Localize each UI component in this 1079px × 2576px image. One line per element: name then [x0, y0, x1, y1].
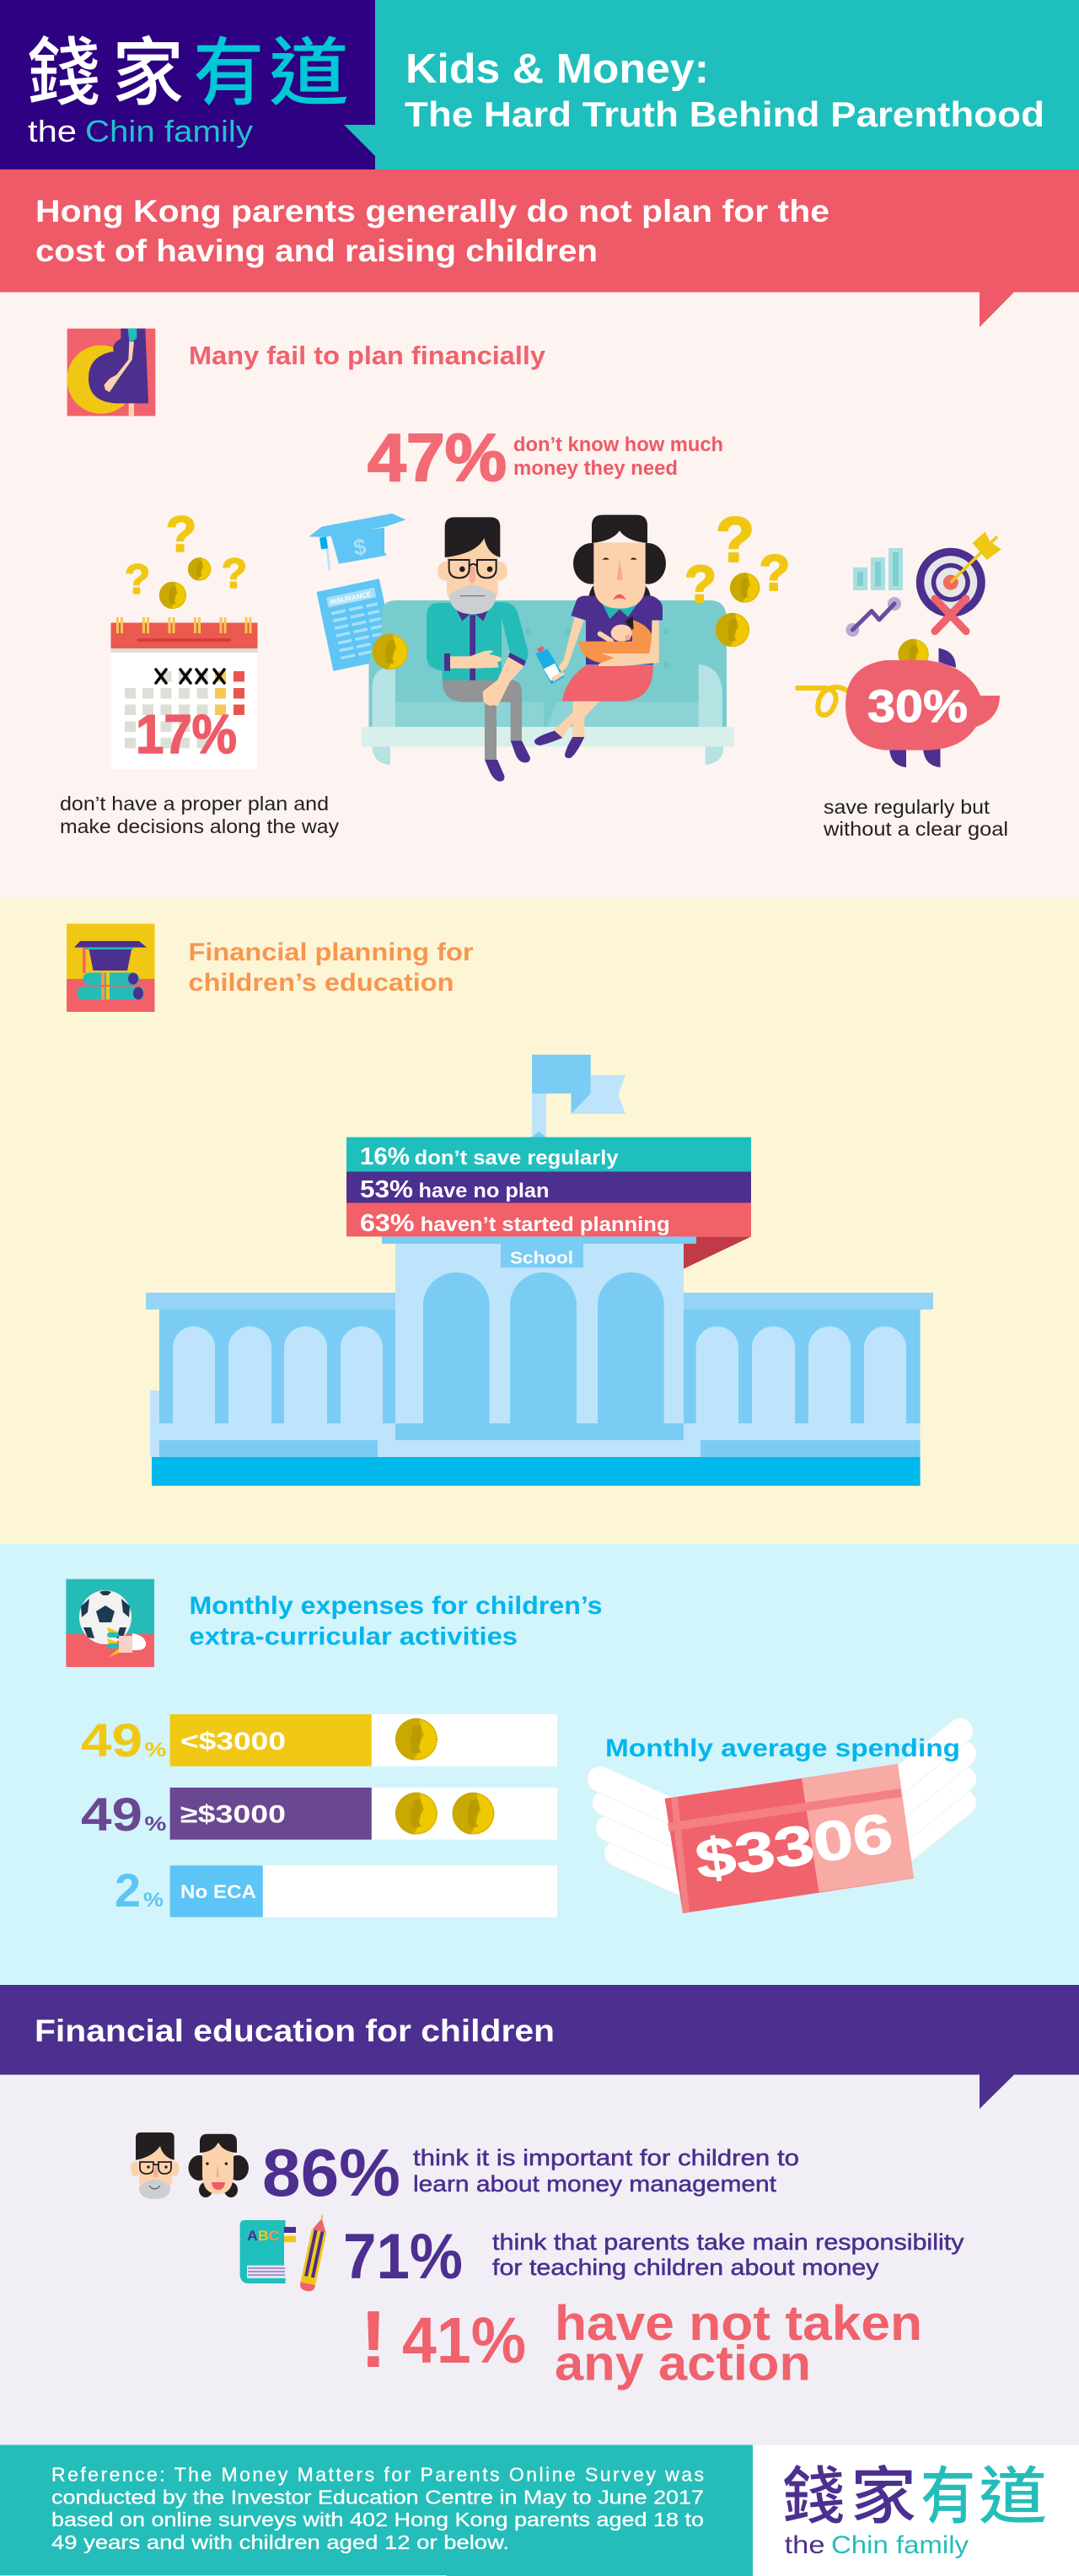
icon: question marks and coins — [125, 506, 247, 609]
stat row: 63 percent: 63% — [360, 1210, 415, 1237]
text: parents responsibility — [492, 2229, 964, 2280]
bar chart: expenses — [81, 1713, 557, 1917]
footer logo: 家 — [851, 2461, 916, 2531]
icon: mother head — [189, 2134, 249, 2197]
icon: ABC book — [240, 2220, 296, 2283]
title — [405, 46, 1044, 134]
footer reference: 49 years and with children aged 12 or below. — [51, 2531, 509, 2553]
icon: question marks and coins: ? — [222, 550, 247, 597]
wings — [600, 1731, 964, 1890]
footer reference: based on online surveys with 402 Hong Kong parents aged 18 to — [51, 2509, 704, 2530]
stat: 17 percent: 17% — [136, 703, 237, 765]
stat: 47 percent — [368, 420, 723, 495]
footer logo: 有 — [921, 2461, 975, 2531]
icon: question marks and coins: ? — [125, 556, 150, 603]
footer logo: the — [785, 2531, 825, 2559]
footer logo: Chin family — [831, 2531, 969, 2559]
footer reference — [0, 2445, 753, 2576]
footer logo: 錢 — [782, 2461, 845, 2531]
bar row: no ECA — [115, 1863, 557, 1917]
icon: bar chart — [845, 548, 903, 637]
stat row: 53 percent — [346, 1172, 751, 1203]
icon: exclamation mark: ! — [360, 2294, 387, 2385]
heading: monthly expenses: Monthly expenses for children’s — [189, 1592, 602, 1620]
icon: question marks and coins right: ? — [716, 504, 754, 576]
caption: no clear goal: save regularly but — [824, 796, 990, 818]
character: father — [427, 517, 530, 782]
icon: graduation cap — [309, 514, 406, 570]
panel: header — [0, 0, 1079, 169]
icon: question marks and coins: ? — [166, 506, 196, 562]
flag — [532, 1055, 625, 1137]
illustration: winged banknote — [600, 1731, 964, 1913]
bar row: below 3000: <$3000 — [180, 1728, 286, 1756]
panel: section 3 extra-curricular — [0, 1544, 1079, 1985]
banner: key message: Hong Kong parents generally do not plan for the — [35, 194, 829, 229]
text: money management importance: learn about money management — [413, 2171, 777, 2197]
title: Kids & Money: — [405, 46, 709, 92]
title: The Hard Truth Behind Parenthood — [405, 94, 1044, 134]
banner: key message: cost of having and raising children — [35, 234, 598, 268]
label: monthly average spending: Monthly average spending — [605, 1734, 960, 1762]
logo: Chinese name: 有 — [193, 31, 264, 115]
text: parents responsibility: think that parents take main responsibility — [492, 2229, 964, 2255]
header background — [0, 0, 1079, 169]
logo: English name: the — [28, 114, 77, 148]
panel: section 1 background — [0, 292, 1079, 898]
banknote — [665, 1764, 914, 1913]
stat: 86 percent: 86% — [262, 2135, 400, 2210]
banner: education stats — [346, 1137, 751, 1237]
icon: question marks and coins right — [684, 504, 790, 647]
icon: question marks and coins right: ? — [684, 556, 717, 614]
icon: question marks and coins right: ? — [760, 545, 790, 601]
caption: no proper plan: don’t have a proper plan and — [60, 793, 329, 815]
bar row: above 3000: % — [144, 1813, 166, 1836]
stat: 47 percent: 47% — [368, 420, 507, 495]
caption: no proper plan — [60, 793, 339, 837]
icon: father head — [131, 2132, 179, 2199]
bar row: no ECA: 2 — [115, 1863, 141, 1917]
stat: 47 percent: don’t know how much — [513, 433, 723, 456]
school sign: School — [510, 1250, 573, 1268]
heading: education — [189, 938, 474, 997]
footer reference: conducted by the Investor Education Centre in May to June 2017 — [51, 2486, 704, 2508]
stat: 30 percent: 30% — [867, 681, 968, 732]
banner: key message — [0, 169, 1079, 327]
caption: no clear goal: without a clear goal — [823, 818, 1008, 840]
logo panel — [0, 0, 375, 169]
bar row: no ECA: No ECA — [180, 1881, 256, 1902]
stat row: 53 percent: 53% — [360, 1176, 413, 1203]
text: no action taken: have not taken — [555, 2296, 922, 2351]
heading: education: children’s education — [189, 969, 454, 997]
bar row: above 3000: 49 — [81, 1788, 142, 1841]
icon: cap on books — [67, 924, 155, 1012]
icon: pregnant woman silhouette — [67, 329, 155, 416]
character: mother with baby — [534, 515, 666, 758]
bar row: above 3000: ≥$3000 — [180, 1801, 286, 1828]
icon: insurance document — [317, 578, 396, 671]
coin on sofa — [373, 634, 408, 670]
footer logo: 道 — [979, 2461, 1047, 2531]
bar row: below 3000: 49 — [81, 1713, 142, 1767]
panel: section 4 background — [0, 2074, 1079, 2445]
banknote: $3306 — [691, 1801, 897, 1891]
stat row: 16 percent: 16% — [360, 1143, 410, 1170]
school sign — [501, 1244, 583, 1268]
calendar — [111, 617, 258, 769]
stat: 47 percent: money they need — [513, 457, 678, 480]
illustration: school building — [146, 1055, 933, 1486]
heading: monthly expenses: extra-curricular activities — [189, 1622, 518, 1651]
logo: Chinese name: 錢 — [27, 31, 100, 115]
logo: Chinese name — [27, 31, 349, 115]
icon: graduation cap: $ — [352, 534, 368, 561]
text: money management importance: think it is important for children to — [413, 2145, 799, 2170]
stat row: 16 percent: don’t save regularly — [415, 1147, 619, 1170]
bar row: below 3000 — [81, 1713, 557, 1767]
text: money management importance — [413, 2145, 799, 2197]
bar row: below 3000: % — [144, 1739, 166, 1761]
caption: no proper plan: make decisions along the way — [60, 815, 339, 837]
icon: insurance document: INSURANCE — [329, 589, 373, 606]
section 3 background — [0, 1544, 1079, 1985]
stat row: 16 percent — [346, 1137, 751, 1172]
text: no action taken — [555, 2296, 922, 2391]
caption: no clear goal — [823, 796, 1008, 840]
banner: financial education: Financial education for children — [35, 2014, 555, 2048]
icon: pencil — [299, 2213, 330, 2293]
heading: monthly expenses — [189, 1592, 602, 1651]
panel: footer — [0, 2445, 1079, 2576]
footer reference: Reference: The Money Matters for Parents Online Survey was — [51, 2464, 704, 2486]
section 2 background — [0, 898, 1079, 1544]
stat row: 53 percent: have no plan — [418, 1180, 550, 1202]
bar row: no ECA: % — [143, 1889, 164, 1912]
icon: target with cross — [916, 532, 1001, 632]
heading: many fail to plan: Many fail to plan financially — [189, 341, 546, 370]
stat: 71 percent: 71% — [343, 2221, 463, 2293]
sofa — [362, 600, 734, 765]
icon: ABC book: ABC — [247, 2228, 280, 2244]
icon: piggy bank — [797, 639, 1000, 767]
banner: financial education — [0, 1985, 1079, 2109]
icon: football and shuttlecock — [66, 1579, 154, 1667]
stat row: 63 percent: haven’t started planning — [421, 1213, 670, 1236]
stat row: 63 percent — [346, 1202, 751, 1237]
logo: Chinese name: 道 — [269, 31, 349, 115]
logo: Chinese name: 家 — [112, 31, 184, 115]
logo: English name — [28, 114, 253, 148]
stat: 41 percent: 41% — [402, 2304, 526, 2377]
text: no action taken: any action — [555, 2336, 811, 2391]
heading: education: Financial planning for — [189, 938, 474, 966]
footer white background — [753, 2445, 1079, 2576]
logo: English name: Chin family — [85, 114, 253, 148]
footer logo — [782, 2461, 1047, 2559]
text: parents responsibility: for teaching children about money — [492, 2255, 879, 2280]
panel: section 2 education — [0, 898, 1079, 1544]
bar row: above 3000 — [81, 1788, 557, 1841]
